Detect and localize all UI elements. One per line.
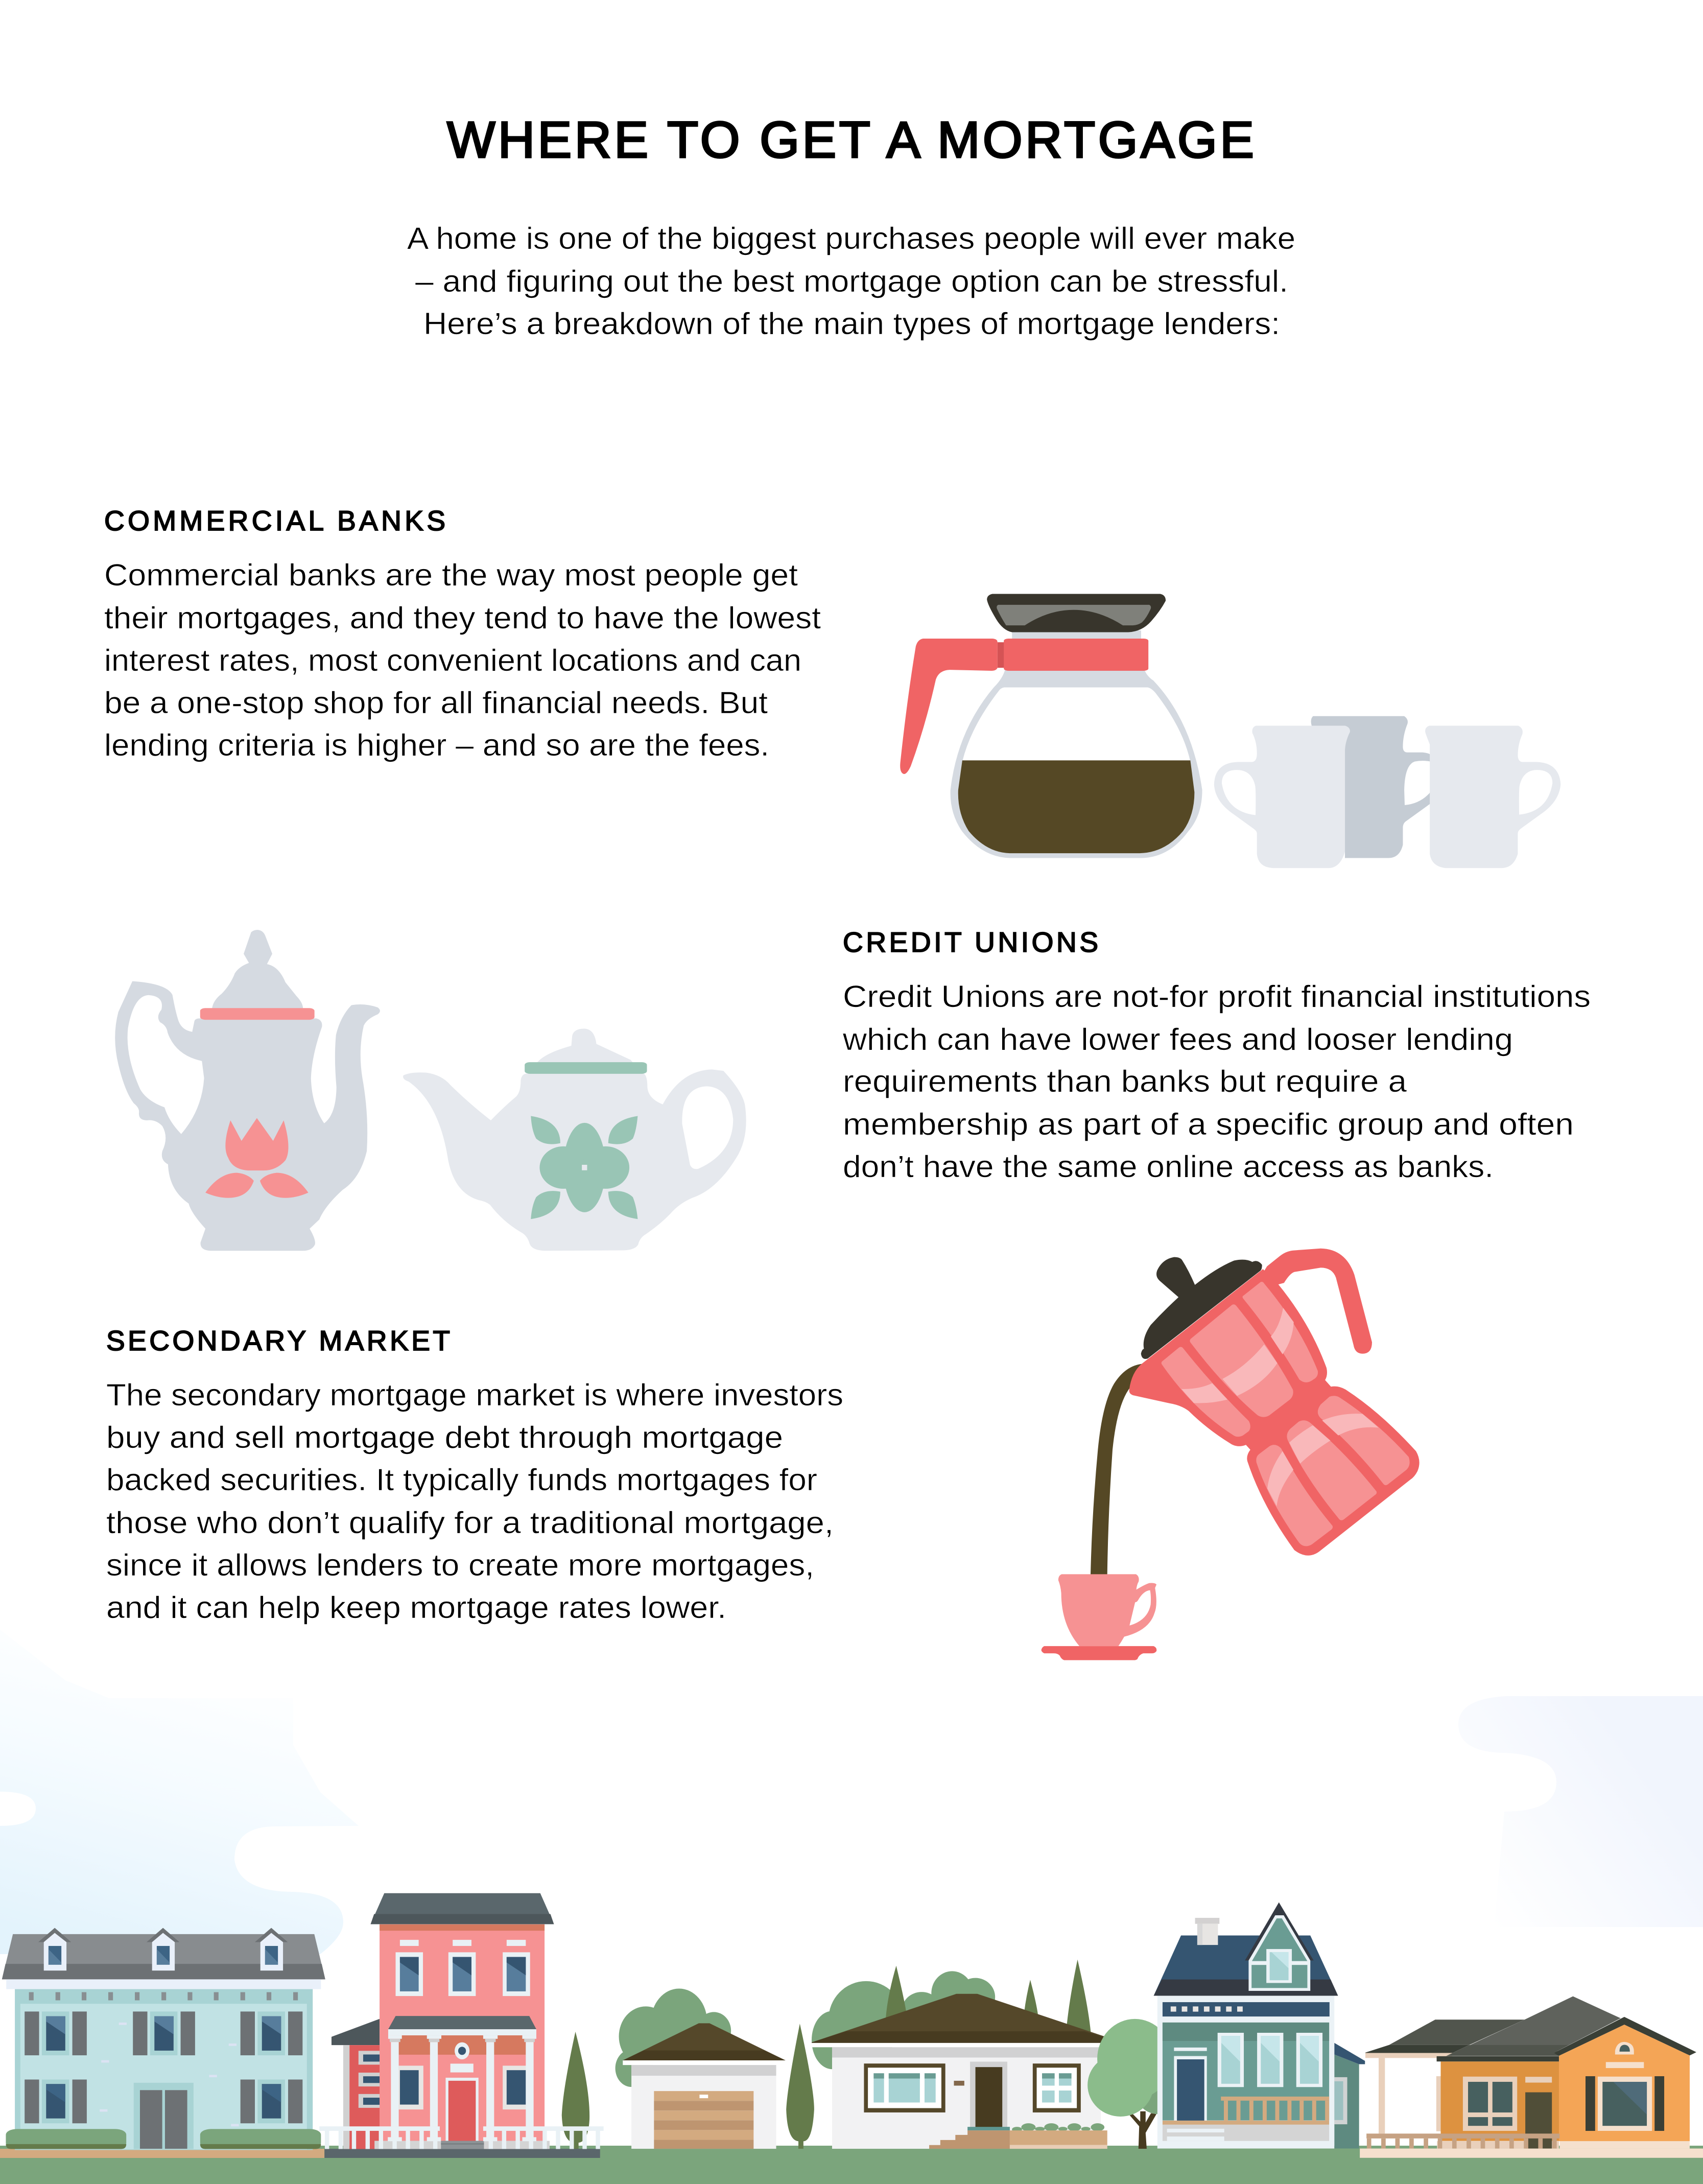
heading: secondary market: SECONDARY MARKET xyxy=(106,1325,450,1356)
tree: round tree xyxy=(1087,2019,1179,2149)
intro text: A home is one of the biggest purchases people will ever make xyxy=(407,221,1295,255)
house: pink townhouse xyxy=(324,1893,600,2158)
fence xyxy=(319,2126,604,2149)
text: secondary market xyxy=(106,1378,843,1625)
street of houses, centre part xyxy=(616,1960,1179,2149)
title: WHERE TO GET A MORTGAGE xyxy=(447,111,1254,169)
text: secondary market: those who don’t qualify for a traditional mortgage, xyxy=(106,1506,834,1540)
tree: cypress xyxy=(786,2024,814,2149)
text: commercial banks: Commercial banks are the way most people get xyxy=(104,558,798,592)
text: secondary market: since it allows lenders to create more mortgages, xyxy=(106,1548,814,1582)
icon: teacup and saucer xyxy=(1042,1574,1156,1660)
text: credit unions: Credit Unions are not-for profit financial institutions xyxy=(843,979,1591,1014)
house: garage xyxy=(616,1989,786,2149)
heading: commercial banks: COMMERCIAL BANKS xyxy=(104,505,445,536)
heading: credit unions: CREDIT UNIONS xyxy=(843,926,1098,958)
house: orange cottage xyxy=(1360,1997,1703,2158)
icon: mugs xyxy=(1214,716,1560,868)
icon: round teapot xyxy=(403,1028,746,1251)
text: credit unions xyxy=(842,979,1591,1184)
street of houses, left part xyxy=(0,1893,604,2158)
ground xyxy=(0,2146,1703,2184)
icon: teapots xyxy=(115,930,746,1251)
text: credit unions: which can have lower fees and looser lending xyxy=(842,1022,1513,1056)
text: credit unions: membership as part of a specific group and often xyxy=(843,1107,1574,1141)
text: commercial banks xyxy=(104,558,821,762)
house: blue mansion xyxy=(0,1928,325,2158)
street of houses, right part xyxy=(1154,1903,1703,2158)
text: secondary market: buy and sell mortgage debt through mortgage xyxy=(106,1420,783,1454)
text: credit unions: don’t have the same online access as banks. xyxy=(843,1149,1494,1184)
text: commercial banks: lending criteria is higher – and so are the fees. xyxy=(104,728,769,762)
text: credit unions: requirements than banks but require a xyxy=(843,1064,1407,1098)
icon: moka pot pouring into cup xyxy=(1042,1249,1420,1660)
icon: coffee carafe and mugs xyxy=(900,594,1560,868)
icon: coffee stream xyxy=(1091,1364,1145,1576)
trees behind bungalow xyxy=(812,1960,1091,2069)
intro text: Here’s a breakdown of the main types of mortgage lenders: xyxy=(423,307,1280,341)
house: bungalow xyxy=(812,1994,1107,2149)
text: secondary market: The secondary mortgage market is where investors xyxy=(106,1378,843,1412)
icon: moka pot xyxy=(1129,1249,1420,1556)
text: commercial banks: interest rates, most convenient locations and can xyxy=(104,643,801,677)
icon: tall coffee pot xyxy=(115,930,380,1251)
text: commercial banks: be a one-stop shop for all financial needs. But xyxy=(104,686,768,720)
house: teal victorian xyxy=(1154,1903,1365,2149)
sky cloud right xyxy=(1458,1696,1703,1927)
icon: carafe xyxy=(900,594,1202,858)
sky cloud left xyxy=(0,1630,359,1954)
text: commercial banks: their mortgages, and they tend to have the lowest xyxy=(104,601,821,635)
tree: cypress xyxy=(562,2032,589,2149)
text: secondary market: and it can help keep mortgage rates lower. xyxy=(106,1590,726,1625)
text: secondary market: backed securities. It typically funds mortgages for xyxy=(106,1463,817,1497)
intro text xyxy=(407,221,1295,341)
intro text: – and figuring out the best mortgage option can be stressful. xyxy=(415,264,1288,298)
